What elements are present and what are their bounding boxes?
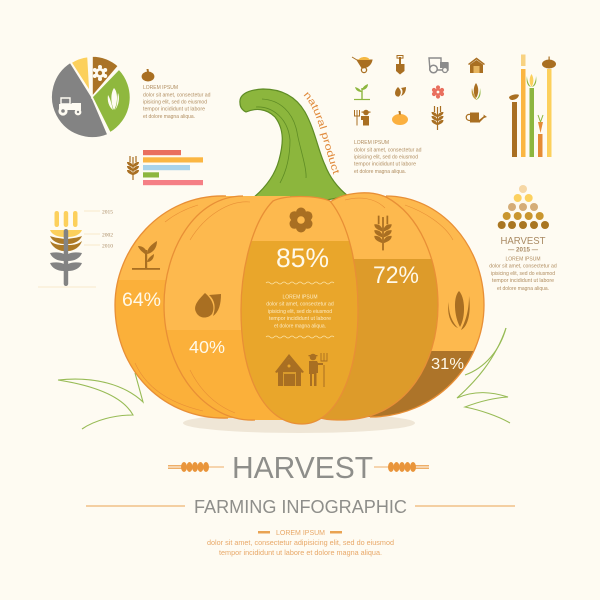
icon: tractor grey bbox=[429, 58, 448, 73]
percent labels: 85% bbox=[276, 243, 329, 273]
icon: shovel bbox=[396, 56, 404, 74]
natural product label: natural product bbox=[304, 92, 340, 174]
text block: top centre: dolor sit amet, consectetur ad bbox=[354, 148, 422, 154]
icon: wheelbarrow bbox=[352, 57, 372, 73]
year labels: 2015 bbox=[102, 210, 113, 216]
bar chart: horizontal bbox=[143, 150, 203, 185]
icon: barn on pumpkin bbox=[275, 354, 304, 386]
text block: centre: ipisicing elit, sed do eiusmod bbox=[268, 309, 332, 315]
text block: centre bbox=[266, 294, 334, 330]
subtitle: FARMING INFOGRAPHIC bbox=[194, 497, 407, 517]
ornament: small wheat pair bbox=[258, 531, 342, 534]
shadow bbox=[183, 413, 415, 433]
year labels bbox=[102, 210, 113, 250]
subtitle rules bbox=[86, 505, 515, 507]
icon: wheat small bbox=[127, 156, 139, 180]
icon: corn bbox=[108, 88, 119, 110]
icon: corn small bbox=[472, 83, 481, 100]
icon: seeds on pumpkin bbox=[195, 293, 221, 318]
text block: top left: dolor sit amet, consectetur ad bbox=[143, 92, 211, 98]
year labels: 2010 bbox=[102, 244, 113, 250]
footer text: tempor incididunt ut labore et dolore magna aliqua. bbox=[219, 548, 382, 557]
segment: centre 85 percent bbox=[238, 196, 362, 431]
harvest 2015 heading: HARVEST bbox=[500, 235, 546, 247]
icon: gear flower bbox=[93, 65, 107, 81]
segment: 64 percent bbox=[114, 195, 234, 419]
icon: carrot bbox=[538, 115, 543, 133]
footer text: dolor sit amet, consectetur adipisicing elit, sed do eiusmod bbox=[207, 538, 394, 547]
icon: sprout bbox=[354, 84, 370, 100]
icon: corn top bbox=[527, 74, 536, 87]
icon: watering can bbox=[466, 112, 487, 123]
icon: tractor bbox=[58, 98, 81, 116]
icon: pumpkin orange bbox=[392, 111, 408, 125]
text block: top centre bbox=[354, 140, 422, 175]
icon: barn bbox=[468, 58, 485, 73]
icon grid bbox=[352, 56, 487, 130]
icon: bean bbox=[509, 94, 519, 100]
harvest 2015 heading bbox=[500, 235, 546, 254]
icon: red flower bbox=[432, 85, 444, 99]
icon: small pumpkin bbox=[142, 69, 154, 82]
text block: right: dolor sit amet, consectetur ad bbox=[489, 264, 557, 270]
text block: right: LOREM IPSUM bbox=[506, 256, 540, 262]
text block: top centre: LOREM IPSUM bbox=[354, 140, 389, 146]
text block: right: tempor incididunt ut labore bbox=[492, 278, 554, 284]
ornament: right wheat bbox=[374, 462, 429, 472]
text block: centre: dolor sit amet, consectetur ad bbox=[266, 302, 334, 308]
grass left bbox=[58, 373, 143, 429]
icon: wheat on pumpkin bbox=[374, 216, 392, 250]
icon: wheat bbox=[432, 106, 444, 130]
text block: right bbox=[489, 256, 557, 292]
text block: top centre: ipisicing elit, sed do eiusmod bbox=[354, 154, 418, 160]
percent labels: 31% bbox=[431, 356, 464, 373]
icon: pumpkin top bbox=[542, 56, 556, 68]
text block: top centre: et dolore magna aliqua. bbox=[354, 169, 406, 175]
icon: corn on pumpkin bbox=[448, 291, 470, 330]
bar chart: vertical crops bbox=[509, 54, 556, 157]
harvest 2015 heading: — 2015 — bbox=[508, 246, 539, 254]
percent labels: 40% bbox=[189, 337, 225, 357]
percent labels: 64% bbox=[122, 289, 161, 311]
segment: 31 percent bbox=[340, 196, 490, 421]
title: HARVEST bbox=[232, 450, 373, 485]
left wheat chart bbox=[38, 210, 113, 287]
grass right bbox=[457, 328, 510, 423]
text block: top left: ipisicing elit, sed do eiusmod bbox=[143, 100, 207, 106]
wavy dividers bbox=[266, 282, 334, 338]
pumpkin bbox=[110, 193, 490, 431]
ornament: left wheat bbox=[168, 462, 224, 472]
text block: top centre: tempor incididunt ut labore bbox=[354, 162, 416, 168]
text block: centre: tempor incididunt ut labore bbox=[269, 316, 331, 322]
year labels: 2002 bbox=[102, 232, 113, 238]
icon: seeds bbox=[395, 87, 406, 97]
percent labels bbox=[122, 243, 464, 373]
icon: flower on pumpkin bbox=[290, 208, 312, 232]
text block: top left: et dolore magna aliqua. bbox=[143, 114, 195, 120]
footer text: LOREM IPSUM bbox=[276, 528, 325, 537]
icon: wheat top bbox=[521, 54, 526, 66]
harvest pyramid bbox=[498, 185, 549, 229]
icon: sprout on pumpkin bbox=[132, 241, 160, 270]
segment: 40 percent bbox=[160, 196, 290, 425]
text block: right: ipisicing elit, sed do eiusmod bbox=[491, 271, 555, 277]
percent labels: 72% bbox=[373, 262, 419, 289]
segment: 72 percent bbox=[320, 193, 445, 424]
text block: top left bbox=[143, 85, 211, 120]
icon: farmer bbox=[354, 110, 370, 126]
text block: top left: LOREM IPSUM bbox=[143, 85, 178, 91]
text block: centre: LOREM IPSUM bbox=[282, 294, 318, 300]
icon: farmer on pumpkin bbox=[308, 353, 327, 387]
stem bbox=[240, 89, 348, 205]
text block: centre: et dolore magna aliqua. bbox=[274, 324, 326, 330]
pie chart bbox=[51, 56, 131, 138]
footer text bbox=[207, 528, 394, 557]
text block: right: et dolore magna aliqua. bbox=[497, 286, 549, 292]
text block: top left: tempor incididunt ut labore bbox=[143, 106, 205, 112]
